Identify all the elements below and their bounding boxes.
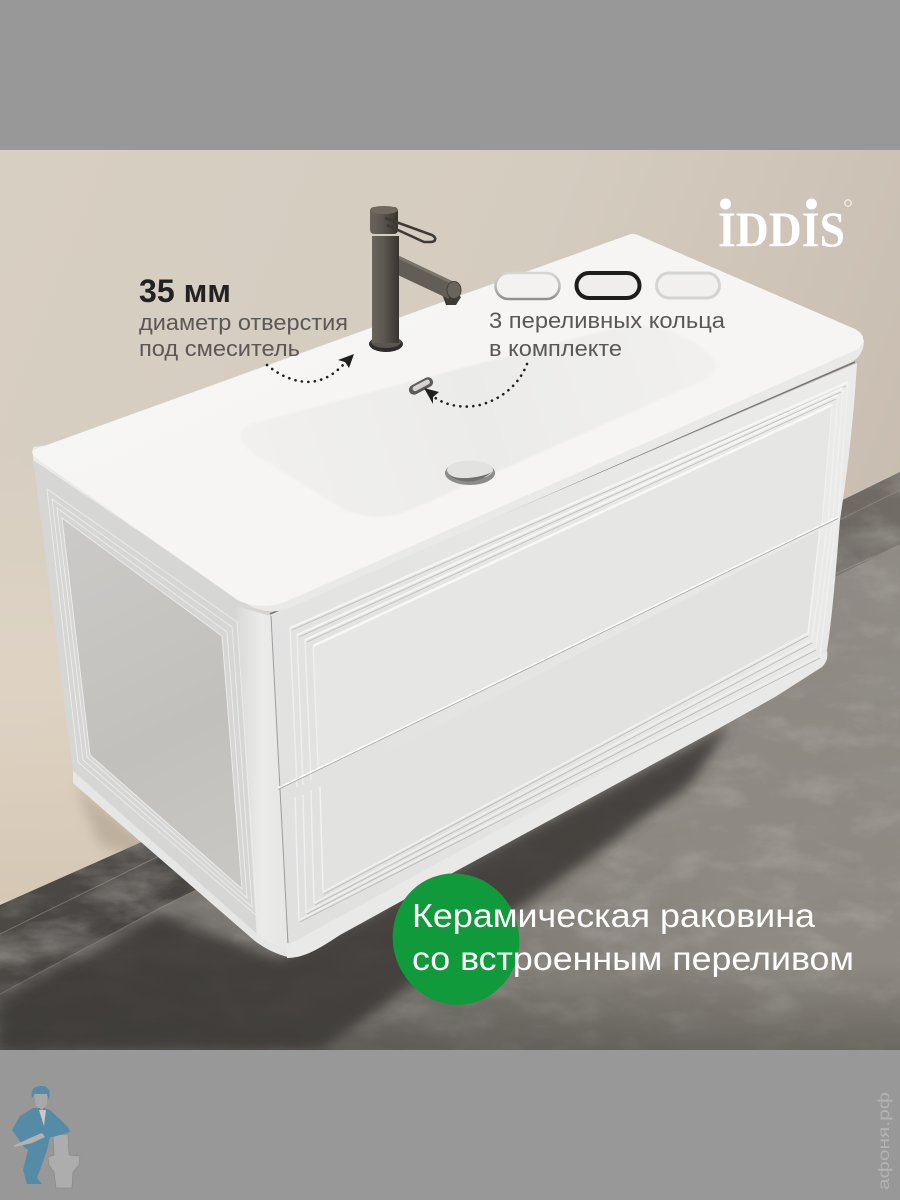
callout: 35 mm hole diameter: диаметр отверстия [139, 310, 348, 335]
plumber body [12, 1108, 70, 1184]
cabinet cast shadow [0, 725, 730, 1050]
countertop edge [33, 340, 864, 611]
lower drawer panel [320, 530, 820, 892]
top drawer panel [313, 405, 832, 768]
callout: three overflow rings included: 3 переливных кольца [489, 308, 726, 333]
ring: black [576, 273, 640, 298]
logo: iddis: IDDIS [718, 201, 845, 257]
skirting board [0, 472, 900, 994]
drawer gap line [278, 517, 838, 788]
icon: plumber mascot with toilet [12, 1086, 80, 1188]
caption: ceramic basin: Керамическая раковина [412, 898, 815, 935]
ring: chrome [496, 273, 560, 299]
icon: three overflow rings [496, 273, 720, 299]
photo: marble floor and skirting [0, 470, 900, 1050]
countertop shadow line [270, 362, 855, 614]
ring: white [656, 273, 720, 298]
arrow: to faucet hole [267, 354, 354, 382]
top drawer moulding [290, 382, 848, 787]
icon: faucet [369, 206, 461, 352]
caption: ceramic basin: со встроенным переливом [412, 941, 854, 978]
callout: 35 mm hole diameter [139, 273, 348, 361]
cabinet plinth edge [286, 650, 827, 958]
top grey band [0, 0, 900, 150]
cabinet front with two drawers [270, 363, 857, 945]
ceramic countertop [32, 234, 863, 606]
lower drawer moulding [295, 520, 836, 922]
callout: 35 mm hole diameter: под смеситель [139, 336, 300, 361]
hair [32, 1086, 50, 1100]
wrench [13, 1133, 45, 1147]
drain [445, 460, 495, 485]
arrow: to overflow slot [424, 364, 527, 407]
cabinet side panel [33, 459, 288, 957]
bottom grey band [0, 1050, 900, 1200]
badge: green blob [374, 855, 538, 1023]
overflow slot [407, 375, 435, 397]
caption: ceramic basin [412, 898, 854, 978]
callout: three overflow rings included [489, 308, 726, 361]
vanity unit [32, 234, 864, 958]
photo: wall background [0, 150, 900, 925]
callout: 35 mm hole diameter: 35 мм [139, 273, 231, 309]
shirt [39, 1110, 46, 1126]
toilet [48, 1134, 80, 1188]
face [34, 1094, 47, 1110]
watermark text: афоня.рф [876, 1092, 893, 1190]
callout: three overflow rings included: в комплекте [489, 336, 622, 361]
basin bowl [241, 325, 716, 517]
